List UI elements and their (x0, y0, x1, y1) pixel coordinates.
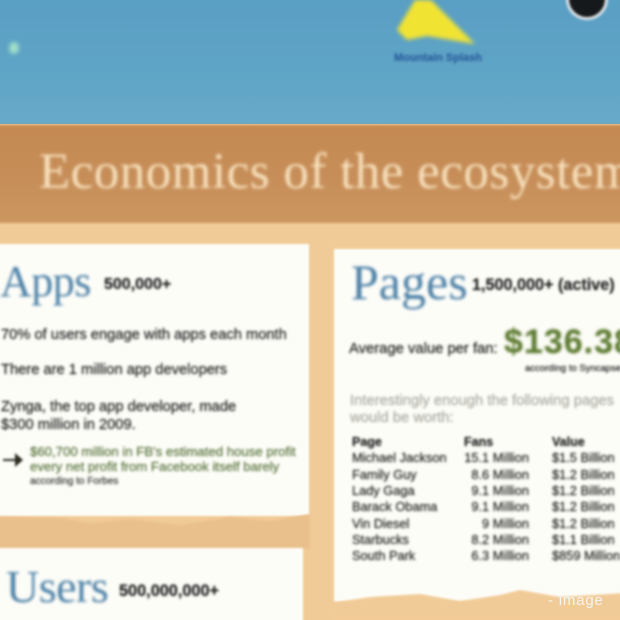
title band (0, 125, 620, 223)
row: Starbucks: Starbucks (352, 532, 409, 547)
torn edge: pages panel (334, 588, 620, 604)
row: Family Guy: $1.2 Billion (552, 467, 615, 482)
icon: arrow (1, 452, 24, 468)
apps stat 3 (0, 398, 238, 433)
row: South Park: South Park (352, 548, 415, 563)
panel: pages (334, 249, 620, 602)
table: page values (350, 434, 620, 563)
apps green note (28, 444, 297, 476)
row: Starbucks (351, 532, 616, 547)
row: Lady Gaga: $1.2 Billion (552, 483, 615, 498)
users heading: Users (6, 561, 108, 612)
apps heading: Apps (0, 257, 91, 306)
panel: users (0, 548, 303, 620)
table header: Fans (464, 435, 493, 449)
row: Lady Gaga: 9.1 Million (471, 483, 529, 498)
value source: according to Syncapse (525, 363, 620, 374)
logo (393, 0, 483, 64)
watermark: - image (548, 592, 604, 609)
row: South Park: $859 Million (552, 548, 620, 563)
apps count: 500,000+ (104, 276, 171, 293)
apps stat 1: 70% of users engage with apps each month (1, 327, 287, 343)
pages count: 1,500,000+ (active) (472, 276, 615, 294)
table intro: Interestingly enough the following pages (350, 393, 614, 409)
apps green note: $60,700 million in FB's estimated house profit (30, 444, 296, 459)
row: Barack Obama: Barack Obama (352, 499, 437, 514)
row: Vin Diesel: 9 Million (482, 516, 529, 531)
row: South Park: 6.3 Million (471, 548, 529, 563)
panel: apps (0, 244, 309, 516)
apps green note: every net profit from Facebook itself barely (30, 459, 279, 474)
row: Vin Diesel (350, 516, 616, 531)
star decoration (9, 42, 19, 54)
row: Family Guy: 8.6 Million (471, 467, 529, 482)
torn edge: apps panel (0, 513, 310, 548)
row: Michael Jackson: Michael Jackson (352, 450, 447, 465)
row: Lady Gaga: Lady Gaga (352, 483, 415, 498)
row: Barack Obama: $1.2 Billion (552, 499, 615, 514)
row: Lady Gaga (350, 483, 616, 500)
row: Family Guy: Family Guy (352, 467, 417, 482)
row: Vin Diesel: Vin Diesel (352, 516, 409, 531)
table header: Value (552, 435, 585, 449)
icon: dark badge (566, 0, 608, 20)
value label: Average value per fan: (349, 341, 498, 357)
row: Vin Diesel: $1.2 Billion (552, 516, 615, 531)
users count: 500,000,000+ (119, 582, 219, 600)
row: Starbucks: 8.2 Million (471, 532, 529, 547)
table intro (348, 392, 615, 426)
row: Family Guy (350, 467, 616, 484)
row: Michael Jackson: $1.5 Billion (552, 450, 615, 465)
table intro: would be worth: (350, 410, 454, 426)
apps note source: according to Forbes (30, 476, 118, 487)
apps stat 3: Zynga, the top app developer, made (1, 399, 236, 415)
icon: yellow triangle (394, 0, 476, 46)
apps stat 2: There are 1 million app developers (1, 362, 227, 378)
row: Barack Obama: 9.1 Million (471, 499, 529, 514)
row: Michael Jackson: 15.1 Million (464, 450, 529, 465)
row: Starbucks: $1.1 Billion (552, 532, 615, 547)
header band (0, 0, 620, 124)
table header: Page (352, 435, 382, 449)
title: Economics of the ecosystem (39, 144, 620, 200)
apps stat 3: $300 million in 2009. (1, 417, 136, 433)
row: Michael Jackson (350, 450, 616, 465)
row: South Park (351, 548, 620, 563)
pages heading: Pages (351, 254, 468, 310)
table header (350, 434, 586, 450)
row: Barack Obama (350, 499, 616, 514)
logo caption: Mountain Splash (394, 52, 482, 64)
